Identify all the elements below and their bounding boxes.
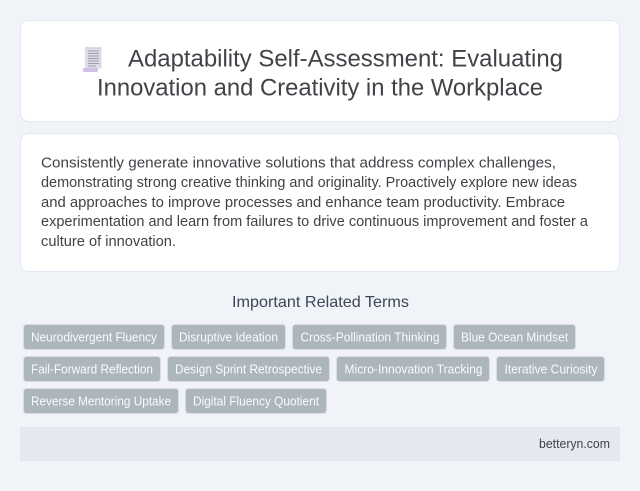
tag: Cross-Pollination Thinking: Cross-Pollination Thinking bbox=[300, 330, 440, 344]
panel: description bbox=[20, 134, 620, 272]
title: Innovation and Creativity in the Workplace bbox=[97, 74, 543, 102]
title bbox=[97, 46, 563, 102]
tag: Neurodivergent Fluency bbox=[24, 324, 164, 350]
tag: Cross-Pollination Thinking bbox=[292, 324, 446, 350]
tag: Fail-Forward Reflection bbox=[24, 356, 160, 382]
tag: Reverse Mentoring Uptake bbox=[24, 388, 178, 414]
tag: Disruptive Ideation: Disruptive Ideation bbox=[179, 330, 278, 344]
tag: Design Sprint Retrospective: Design Sprint Retrospective bbox=[175, 362, 322, 376]
tag: Micro-Innovation Tracking: Micro-Innovation Tracking bbox=[344, 362, 483, 376]
text block: description bbox=[41, 156, 589, 250]
icon: document scroll bbox=[83, 47, 102, 72]
text block: description: experimentation and learn from failures to drive continuous improvement and foster a bbox=[41, 214, 589, 230]
title: Adaptability Self-Assessment: Evaluating bbox=[128, 46, 563, 72]
text block: description: Consistently generate innovative solutions that address complex challenges, bbox=[41, 156, 556, 172]
text block: description: demonstrating strong creative thinking and originality. Proactively explore new ideas bbox=[41, 175, 577, 191]
tag: Iterative Curiosity bbox=[496, 356, 604, 382]
tag: Reverse Mentoring Uptake: Reverse Mentoring Uptake bbox=[31, 394, 171, 408]
footer bar bbox=[20, 427, 620, 461]
tag: Neurodivergent Fluency: Neurodivergent Fluency bbox=[31, 330, 158, 344]
text block: description: and approaches to improve processes and enhance team productivity. Embrace bbox=[41, 195, 565, 211]
footer text: betteryn.com bbox=[539, 437, 610, 451]
tag: Blue Ocean Mindset bbox=[454, 324, 576, 350]
panel: header bbox=[20, 20, 620, 122]
tag: Design Sprint Retrospective bbox=[168, 356, 330, 382]
text block: description: culture of innovation. bbox=[41, 234, 176, 250]
tag: Disruptive Ideation bbox=[172, 324, 286, 350]
tags: related terms bbox=[24, 324, 604, 414]
heading: related terms: Important Related Terms bbox=[232, 294, 409, 311]
tag: Fail-Forward Reflection: Fail-Forward Reflection bbox=[31, 362, 153, 376]
tag: Micro-Innovation Tracking bbox=[336, 356, 490, 382]
tag: Digital Fluency Quotient bbox=[186, 388, 326, 414]
tag: Digital Fluency Quotient: Digital Fluency Quotient bbox=[193, 394, 320, 408]
tag: Iterative Curiosity: Iterative Curiosity bbox=[504, 362, 598, 376]
tag: Blue Ocean Mindset: Blue Ocean Mindset bbox=[461, 330, 568, 344]
